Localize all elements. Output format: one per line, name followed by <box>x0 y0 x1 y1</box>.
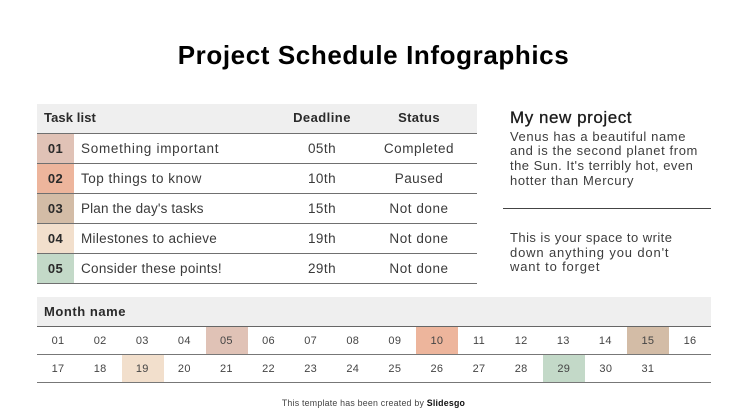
calendar row 1: 09 <box>388 335 401 347</box>
task 02: Top things to know <box>81 171 202 186</box>
deadline 01: 05th <box>308 141 336 156</box>
calendar row 2: 19 <box>136 363 149 375</box>
badge 02 <box>37 164 74 193</box>
calendar row 2: 22 <box>262 363 275 375</box>
calendar row 2: 25 <box>388 363 401 375</box>
status 01: Completed <box>384 141 454 156</box>
calendar row 2: 23 <box>304 363 317 375</box>
highlight: day 15 <box>627 327 669 354</box>
text: venus description: and is the second planet from <box>510 143 698 158</box>
deadline 04: 19th <box>308 231 336 246</box>
calendar header <box>37 297 711 327</box>
divider <box>503 208 711 209</box>
heading: month name: Month name <box>44 304 126 319</box>
badge 04: 04 <box>48 231 63 246</box>
badge 05: 05 <box>48 261 63 276</box>
calendar row 2 <box>37 355 711 383</box>
text: reminder note: want to forget <box>510 259 600 274</box>
panel: task table <box>37 104 477 284</box>
status 05: Not done <box>389 261 449 276</box>
task 04: Milestones to achieve <box>81 231 217 246</box>
calendar row 2: 17 <box>52 363 64 375</box>
calendar row 1: 06 <box>262 335 275 347</box>
text: venus description: hotter than Mercury <box>510 173 634 188</box>
task 05: Consider these points! <box>81 261 222 276</box>
heading: deadline: Deadline <box>293 110 351 125</box>
text: reminder note: down anything you don't <box>510 245 669 260</box>
calendar row 1: 05 <box>220 335 233 347</box>
row 05 <box>37 253 477 284</box>
badge 05 <box>37 254 74 282</box>
calendar row 2: 20 <box>178 363 191 375</box>
task 01: Something important <box>81 141 219 156</box>
calendar row 1: 01 <box>52 335 64 347</box>
panel: month calendar <box>37 297 711 383</box>
calendar row 2: 18 <box>94 363 107 375</box>
calendar row 1: 11 <box>473 335 485 347</box>
calendar row 1: 12 <box>515 335 528 347</box>
calendar row 1: 03 <box>136 335 149 347</box>
highlight: day 19 <box>122 355 164 382</box>
calendar row 1: 13 <box>557 335 570 347</box>
calendar row 1: 02 <box>94 335 107 347</box>
heading: task list: Task list <box>44 110 96 125</box>
row 02 <box>37 163 477 194</box>
footer credit: This template has been created by Slidesgo <box>282 398 465 408</box>
highlight: day 05 <box>206 327 248 354</box>
heading: my new project: My new project <box>510 108 632 127</box>
row 04 <box>37 223 477 254</box>
status 03: Not done <box>389 201 449 216</box>
panel: project notes <box>503 108 711 274</box>
row 01 <box>37 133 477 164</box>
calendar row 1 <box>37 327 711 355</box>
highlight: day 10 <box>416 327 458 354</box>
calendar row 2: 31 <box>642 363 654 375</box>
calendar row 2: 27 <box>473 363 485 375</box>
calendar row 2: 28 <box>515 363 528 375</box>
status 04: Not done <box>389 231 449 246</box>
text: reminder note <box>510 230 672 274</box>
task 03: Plan the day's tasks <box>81 201 204 216</box>
calendar row 1: 07 <box>304 335 317 347</box>
calendar row 2: 30 <box>599 363 612 375</box>
badge 03 <box>37 194 74 223</box>
row 03 <box>37 193 477 224</box>
calendar row 1: 08 <box>346 335 359 347</box>
calendar row 2: 26 <box>431 363 443 375</box>
status 02: Paused <box>395 171 443 186</box>
badge 02: 02 <box>48 171 63 186</box>
calendar row 1: 14 <box>599 335 612 347</box>
deadline 03: 15th <box>308 201 336 216</box>
badge 01: 01 <box>48 141 63 156</box>
calendar row 2: 21 <box>220 363 233 375</box>
deadline 02: 10th <box>308 171 336 186</box>
badge 03: 03 <box>48 201 63 216</box>
badge 01 <box>37 134 74 163</box>
text: venus description: the Sun. It's terribly hot, even <box>510 158 693 173</box>
calendar row 2: 24 <box>346 363 359 375</box>
calendar row 1: 04 <box>178 335 191 347</box>
calendar row 1: 16 <box>684 335 696 347</box>
badge 04 <box>37 224 74 253</box>
text: reminder note: This is your space to write <box>510 230 672 245</box>
calendar row 2: 29 <box>557 363 570 375</box>
deadline 05: 29th <box>308 261 336 276</box>
calendar row 1: 15 <box>642 335 654 347</box>
text: venus description: Venus has a beautiful name <box>510 128 686 144</box>
heading: status: Status <box>398 110 440 125</box>
calendar row 1: 10 <box>431 335 443 347</box>
table header <box>37 104 477 133</box>
text: venus description <box>510 128 698 188</box>
highlight: day 29 <box>543 355 585 382</box>
title: Project Schedule Infographics <box>178 40 569 70</box>
